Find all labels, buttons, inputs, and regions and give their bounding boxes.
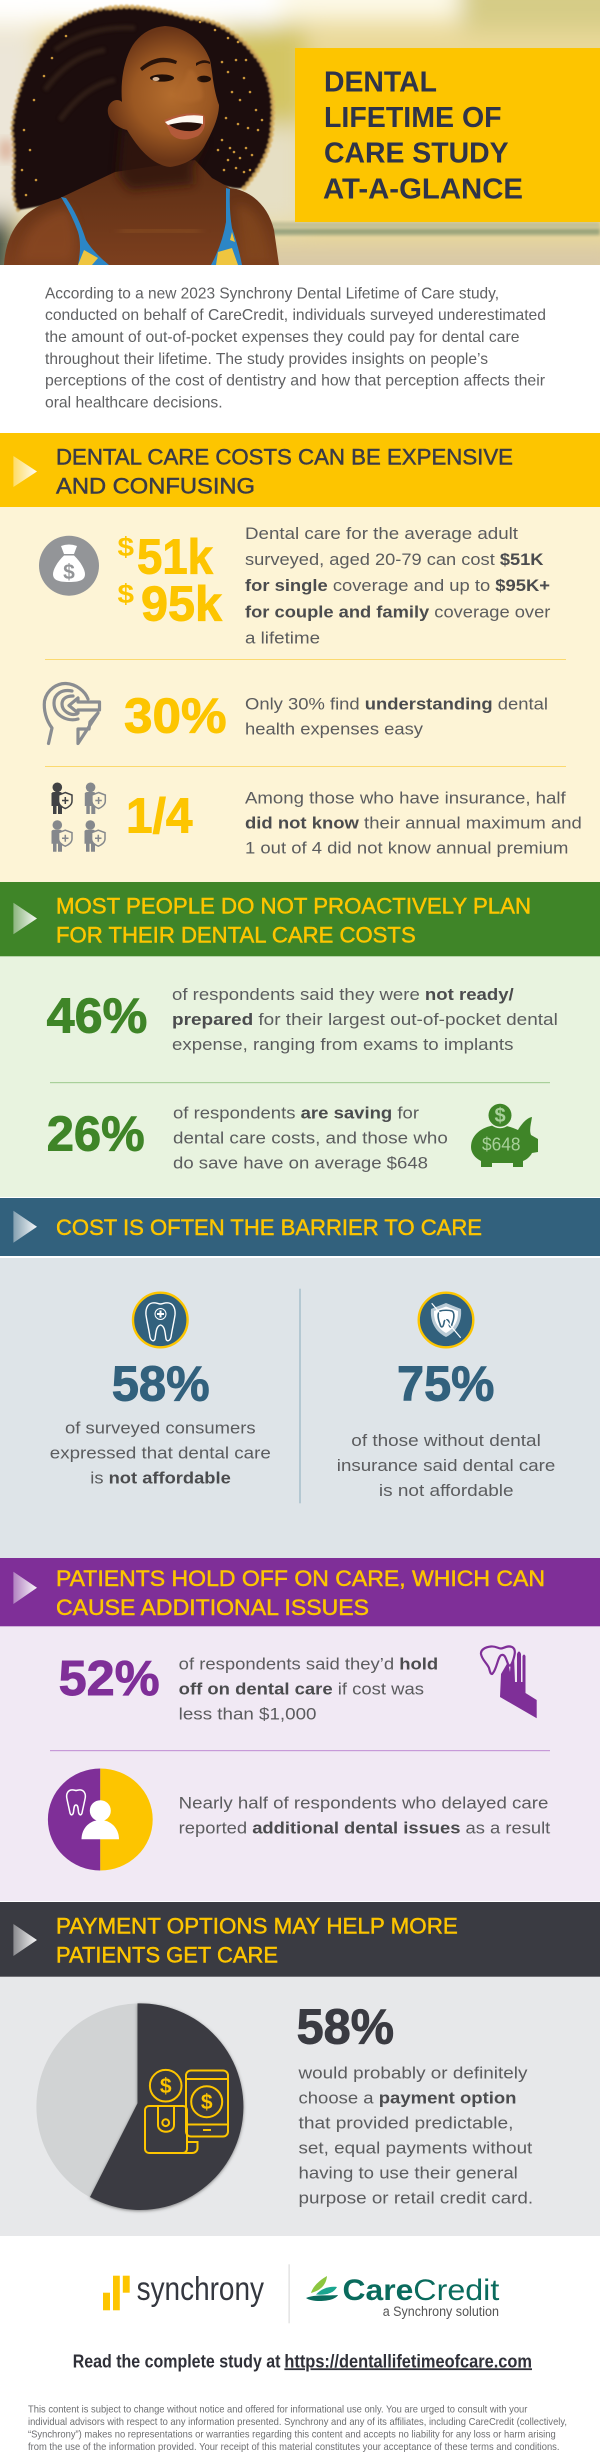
text: lifetime cost: for couple and family coverage over	[245, 602, 551, 621]
call to action link text: https://dentallifetimeofcare.com	[284, 2351, 532, 2371]
panel: cost barrier	[0, 1198, 600, 1558]
text: understanding expenses: Only 30% find understanding dental	[245, 694, 548, 713]
text: not ready: expense, ranging from exams to implants	[172, 1035, 513, 1054]
title box	[295, 48, 600, 222]
icon: payment wallet and phone	[145, 2070, 228, 2153]
title box: CARE STUDY	[324, 138, 508, 170]
text: payment option: having to use their general	[298, 2163, 518, 2182]
text: understanding expenses: health expenses easy	[245, 719, 424, 738]
hair	[12, 7, 273, 210]
text: payment option	[297, 2063, 533, 2207]
stat: 58%: 58%	[112, 1358, 210, 1412]
text: uninsured not affordable: insurance said dental care	[337, 1456, 555, 1475]
text: uninsured not affordable	[337, 1431, 555, 1500]
arrow: section marker	[13, 456, 37, 487]
panel: payment options	[0, 1902, 600, 2236]
text: not affordable	[50, 1418, 271, 1487]
icon: piggy bank: $	[494, 1105, 506, 1127]
stat: 75%: 75%	[397, 1358, 494, 1412]
title box: LIFETIME OF	[324, 102, 502, 134]
text: payment option: would probably or definitely	[297, 2063, 528, 2082]
arrow: section marker	[13, 1924, 37, 1956]
intro paragraph: the amount of out-of-pocket expenses they could pay for dental care	[45, 329, 520, 346]
text: not affordable: of surveyed consumers	[65, 1418, 256, 1437]
icon: money bag	[39, 536, 99, 596]
arrow: section marker	[13, 903, 37, 934]
text: additional issues: Nearly half of respondents who delayed care	[179, 1793, 548, 1812]
intro paragraph: throughout their lifetime. The study provides insights on people’s	[45, 351, 488, 368]
stat: $51k and $95k: $	[118, 579, 134, 609]
heading: barrier: COST IS OFTEN THE BARRIER TO CARE	[56, 1215, 482, 1240]
text: not ready: prepared for their largest out-of-pocket dental	[172, 1010, 558, 1029]
logo: CareCredit	[306, 2274, 500, 2319]
disclaimer	[28, 2404, 567, 2453]
hero photo	[0, 0, 600, 285]
text: uninsured not affordable: of those without dental	[351, 1431, 541, 1450]
stat: 26%: 26%	[47, 1108, 145, 1162]
logo: synchrony	[103, 2270, 264, 2310]
text: not ready: of respondents said they were not ready/	[172, 985, 514, 1004]
intro paragraph: perceptions of the cost of dentistry and how that perception affects their	[45, 373, 546, 390]
text: hold off: less than $1,000	[179, 1704, 316, 1723]
stat: 1/4: 1/4	[126, 790, 192, 844]
stat: $51k and $95k: $	[118, 532, 134, 562]
stat: 58%: 58%	[297, 2000, 394, 2054]
logo: CareCredit: Care	[342, 2274, 413, 2307]
title box: DENTAL	[324, 67, 437, 99]
text: insurance knowledge: did not know their annual maximum and	[245, 814, 582, 833]
heading: planning	[56, 893, 531, 947]
icon: piggy bank: $648	[482, 1135, 520, 1155]
intro paragraph	[45, 285, 546, 412]
icon: payment wallet and phone: $	[201, 2091, 213, 2114]
text: saving	[173, 1103, 448, 1172]
stat: 52%: 52%	[59, 1652, 160, 1706]
text: lifetime cost	[245, 524, 551, 647]
text: additional issues: reported additional dental issues as a result	[179, 1818, 551, 1837]
heading: costs	[56, 444, 513, 498]
heading: delayed care: PATIENTS HOLD OFF ON CARE, WHICH CAN	[56, 1566, 545, 1591]
heading: delayed care: CAUSE ADDITIONAL ISSUES	[56, 1595, 369, 1620]
text: insurance knowledge	[245, 788, 582, 857]
face	[108, 26, 219, 167]
text: payment option: purpose or retail credit card.	[298, 2188, 533, 2207]
stat: $51k and $95k: 95k	[141, 578, 223, 632]
text: lifetime cost: surveyed, aged 20-79 can cost $51K	[245, 550, 544, 569]
text: hold off	[179, 1654, 438, 1723]
text: additional issues	[179, 1793, 551, 1837]
panel: dental care costs	[0, 433, 600, 882]
text: saving: of respondents are saving for	[173, 1103, 419, 1122]
pie chart: 58%	[36, 2003, 243, 2210]
heading: planning: FOR THEIR DENTAL CARE COSTS	[56, 922, 416, 947]
disclaimer: This content is subject to change without notice and offered for informational use only. You are urged to consult with your	[28, 2404, 528, 2416]
heading: payment options: PATIENTS GET CARE	[56, 1942, 278, 1967]
text: lifetime cost: a lifetime	[245, 628, 320, 647]
text: insurance knowledge: 1 out of 4 did not know annual premium	[245, 838, 568, 857]
icon: half pie with person and tooth	[48, 1768, 153, 1870]
heading: payment options: PAYMENT OPTIONS MAY HELP MORE	[56, 1913, 458, 1938]
text: hold off: off on dental care if cost was	[179, 1679, 424, 1698]
title box: AT-A-GLANCE	[323, 173, 523, 205]
icon: money bag: $	[63, 561, 75, 584]
heading: costs: AND CONFUSING	[56, 473, 255, 498]
arrow: section marker	[13, 1572, 37, 1604]
heading: planning: MOST PEOPLE DO NOT PROACTIVELY PLAN	[56, 893, 531, 918]
stat: $51k and $95k: 51k	[137, 530, 214, 584]
intro paragraph: According to a new 2023 Synchrony Dental Lifetime of Care study,	[45, 285, 499, 302]
icon: piggy bank	[471, 1102, 538, 1167]
text: not affordable: is not affordable	[90, 1468, 231, 1487]
stat: 46%: 46%	[47, 990, 147, 1044]
text: lifetime cost: Dental care for the average adult	[245, 524, 518, 543]
dress straps	[61, 197, 109, 265]
heading: costs: DENTAL CARE COSTS CAN BE EXPENSIVE	[56, 444, 513, 469]
text: saving: do save have on average $648	[173, 1153, 428, 1172]
intro paragraph: oral healthcare decisions.	[45, 395, 223, 412]
icon: four insured people	[52, 782, 105, 852]
icon: hand holding tooth	[481, 1646, 537, 1718]
intro paragraph: conducted on behalf of CareCredit, individuals surveyed underestimated	[45, 307, 546, 324]
text: payment option: that provided predictable,	[298, 2113, 514, 2132]
panel: delayed care	[0, 1558, 600, 1901]
stat: $51k and $95k	[118, 530, 223, 632]
disclaimer: “Synchrony”) makes no representations or warranties regarding this content and accepts no liability for any loss or harm arising	[28, 2428, 556, 2440]
call to action link text	[73, 2351, 532, 2371]
logo: CareCredit: a Synchrony solution	[383, 2304, 499, 2319]
stat: 30%: 30%	[124, 689, 227, 743]
heading: payment options	[56, 1913, 458, 1967]
text: understanding expenses	[245, 694, 548, 738]
icon: payment wallet and phone: $	[160, 2075, 172, 2098]
logo: synchrony: synchrony	[137, 2270, 264, 2307]
call to action link text: Read the complete study at	[73, 2351, 280, 2371]
icon: tooth with plus	[133, 1293, 188, 1347]
text: insurance knowledge: Among those who have insurance, half	[245, 788, 566, 807]
text: payment option: set, equal payments without	[298, 2138, 533, 2157]
text: lifetime cost: for single coverage and up to $95K+	[245, 576, 550, 595]
shoulders and chest	[4, 160, 279, 265]
text: not ready	[172, 985, 558, 1054]
icon: crossed-out tooth shield	[419, 1293, 473, 1347]
text: not affordable: expressed that dental care	[50, 1443, 271, 1462]
text: uninsured not affordable: is not affordable	[379, 1481, 514, 1500]
text: saving: dental care costs, and those who	[173, 1128, 448, 1147]
icon: head with arrow	[44, 683, 100, 744]
text: payment option: choose a payment option	[298, 2088, 516, 2107]
logo: CareCredit: Credit	[413, 2274, 500, 2307]
text: hold off: of respondents said they’d hold	[179, 1654, 438, 1673]
arrow: section marker	[13, 1211, 37, 1243]
panel: planning	[0, 882, 600, 1197]
heading: delayed care	[56, 1566, 545, 1620]
